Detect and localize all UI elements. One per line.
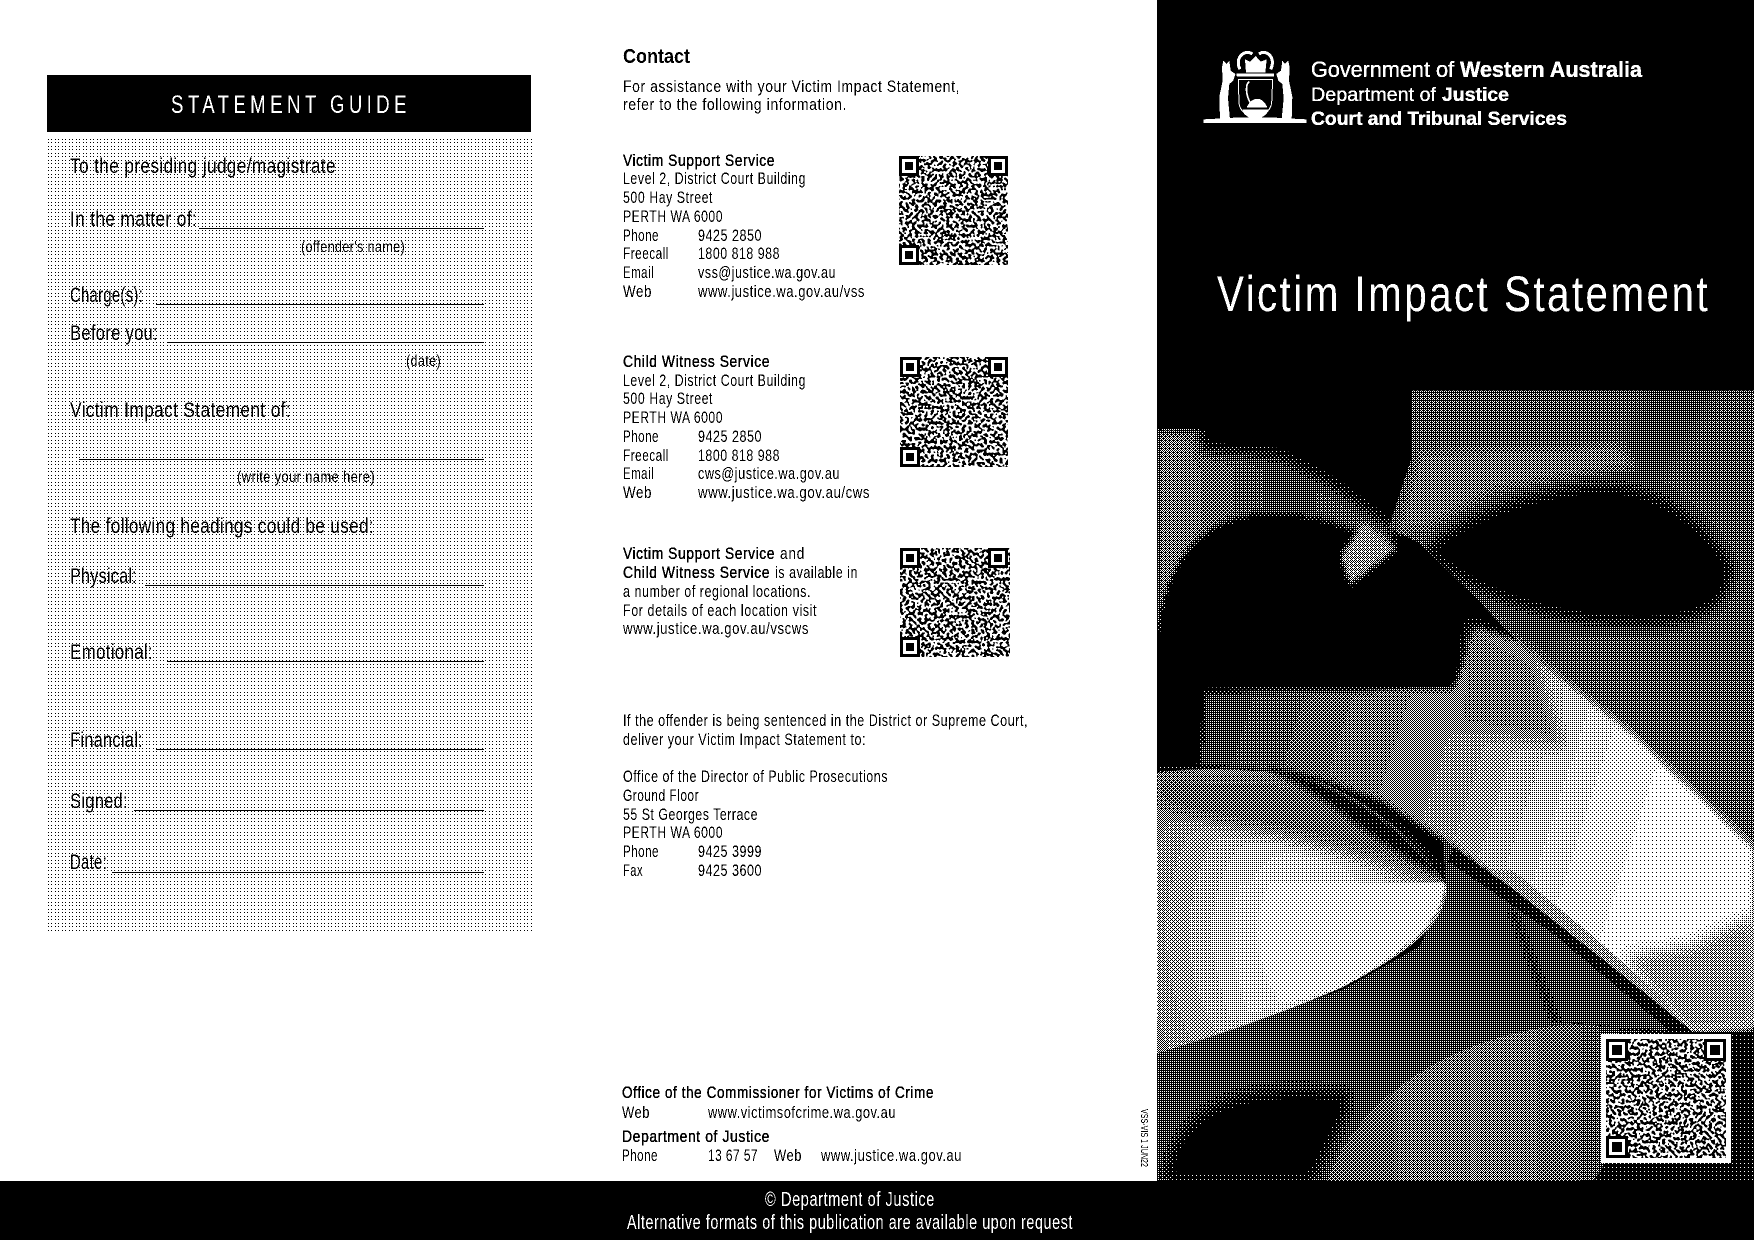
child witness service details: Web bbox=[623, 483, 652, 502]
form field: victim impact statement of: (write your name here) bbox=[237, 469, 375, 486]
regional locations note: and bbox=[780, 544, 805, 563]
child witness service details: PERTH WA 6000 bbox=[623, 408, 723, 427]
form field: presiding judge: To the presiding judge/magistrate bbox=[70, 155, 336, 178]
cover photograph: dithered abstract curves bbox=[1150, 380, 1754, 1181]
child witness service details: cws@justice.wa.gov.au bbox=[698, 464, 840, 483]
office of the director of public prosecutions address: 9425 3600 bbox=[698, 861, 762, 880]
victim support service details: vss@justice.wa.gov.au bbox=[698, 263, 836, 282]
regional locations note: Child Witness Service bbox=[623, 563, 770, 582]
department of justice contact: 13 67 57 bbox=[708, 1146, 758, 1165]
victim support service details bbox=[623, 151, 865, 301]
icon: Western Australia coat of arms bbox=[1203, 52, 1307, 123]
child witness service details: Phone bbox=[623, 427, 659, 446]
regional locations note: Victim Support Service bbox=[623, 544, 775, 563]
lens highlight bbox=[1157, 769, 1447, 1053]
form field: in the matter of: (offender's name) bbox=[301, 239, 405, 256]
cover black background bbox=[1157, 0, 1754, 1181]
office of the director of public prosecutions address: Ground Floor bbox=[623, 786, 699, 805]
bottom shapes bbox=[1165, 1091, 1350, 1181]
form field: charges: Charge(s): bbox=[70, 284, 143, 307]
delivery instructions: If the offender is being sentenced in the District or Supreme Court, bbox=[623, 711, 1028, 730]
victim support service details: PERTH WA 6000 bbox=[623, 207, 723, 226]
regional locations note: www.justice.wa.gov.au/vscws bbox=[622, 619, 809, 638]
victim support service details: 9425 2850 bbox=[698, 226, 762, 245]
form field: victim impact statement of: Victim Impact Statement of: bbox=[70, 399, 291, 422]
regional locations note: is available in bbox=[775, 563, 858, 582]
child witness service details: Freecall bbox=[623, 446, 669, 465]
department of justice contact: www.justice.wa.gov.au bbox=[820, 1146, 962, 1165]
child witness service details: 1800 818 988 bbox=[698, 446, 780, 465]
footer bar bbox=[0, 1181, 1754, 1240]
delivery instructions: deliver your Victim Impact Statement to: bbox=[623, 730, 866, 749]
victim support service details: Freecall bbox=[623, 244, 669, 263]
form field: physical: Physical: bbox=[70, 565, 137, 588]
form field: before you: (date) bbox=[406, 353, 441, 370]
QR code: victim support service bbox=[899, 156, 1008, 265]
regional locations note bbox=[622, 544, 858, 638]
suggested headings intro: The following headings could be used: bbox=[70, 515, 374, 538]
government department names: Western Australia bbox=[1460, 57, 1643, 82]
office of the director of public prosecutions address: PERTH WA 6000 bbox=[623, 823, 723, 842]
form field: in the matter of: In the matter of: bbox=[70, 208, 197, 231]
office of the director of public prosecutions address: Fax bbox=[623, 861, 643, 880]
child witness service details: Level 2, District Court Building bbox=[623, 371, 806, 390]
victim support service details: Level 2, District Court Building bbox=[623, 169, 806, 188]
footer alternative formats line: Alternative formats of this publication are available upon request bbox=[627, 1212, 1073, 1234]
QR code: regional locations bbox=[900, 548, 1010, 657]
government department names: Government of bbox=[1311, 57, 1455, 82]
victim support service details: Phone bbox=[623, 226, 659, 245]
panel: statement guide form bbox=[47, 75, 532, 933]
victim support service details: www.justice.wa.gov.au/vss bbox=[697, 282, 865, 301]
lower dark zone bbox=[1157, 839, 1689, 1181]
QR code: child witness service bbox=[900, 357, 1008, 467]
commissioner for victims of crime contact bbox=[622, 1083, 934, 1122]
contact intro: refer to the following information. bbox=[623, 95, 847, 114]
victim support service details: Victim Support Service bbox=[623, 151, 775, 170]
form field: before you: Before you: bbox=[70, 322, 158, 345]
diagonal bright band bbox=[1200, 630, 1754, 1033]
government department names bbox=[1311, 57, 1643, 130]
department of justice contact: Department of Justice bbox=[622, 1127, 770, 1146]
regional locations note: a number of regional locations. bbox=[623, 582, 811, 601]
office of the director of public prosecutions address: 55 St Georges Terrace bbox=[623, 805, 758, 824]
child witness service details: 500 Hay Street bbox=[623, 389, 713, 408]
statement guide heading bar bbox=[47, 75, 531, 132]
dotted form background bbox=[48, 139, 532, 933]
office of the director of public prosecutions address: Office of the Director of Public Prosecutions bbox=[623, 767, 888, 786]
dark edge strip and sliver bbox=[1450, 854, 1689, 1038]
statement guide heading bar: STATEMENT GUIDE bbox=[171, 91, 411, 119]
vertical publication code: VSS-VIS 1 JUN22 bbox=[1138, 1109, 1149, 1167]
office of the director of public prosecutions address bbox=[623, 767, 888, 880]
government department names: Court and Tribunal Services bbox=[1311, 108, 1567, 130]
QR code: cover bbox=[1601, 1034, 1731, 1163]
victim support service details: Web bbox=[623, 282, 652, 301]
child witness service details: Email bbox=[623, 464, 654, 483]
panel: cover bbox=[1150, 0, 1754, 1181]
commissioner for victims of crime contact: Web bbox=[622, 1103, 650, 1122]
form field: emotional: Emotional: bbox=[70, 641, 153, 664]
form field: date: Date: bbox=[70, 851, 107, 874]
contact intro bbox=[623, 77, 960, 114]
victim support service details: Email bbox=[623, 263, 654, 282]
form field: in the matter of bbox=[70, 208, 484, 256]
department of justice contact bbox=[622, 1127, 962, 1165]
department of justice contact: Phone bbox=[622, 1146, 658, 1165]
commissioner for victims of crime contact: Office of the Commissioner for Victims of Crime bbox=[622, 1083, 934, 1102]
contact intro: For assistance with your Victim Impact Statement, bbox=[623, 77, 960, 96]
department of justice contact: Web bbox=[774, 1146, 802, 1165]
child witness service details: 9425 2850 bbox=[698, 427, 762, 446]
victim support service details: 500 Hay Street bbox=[623, 188, 713, 207]
form field: victim impact statement of bbox=[70, 399, 484, 486]
victim support service details: 1800 818 988 bbox=[698, 244, 780, 263]
child witness service details bbox=[623, 352, 870, 502]
delivery instructions bbox=[623, 711, 1028, 749]
form field: signed: Signed: bbox=[70, 790, 128, 813]
footer copyright line: © Department of Justice bbox=[765, 1189, 935, 1211]
office of the director of public prosecutions address: Phone bbox=[623, 842, 659, 861]
dark shapes bbox=[1157, 513, 1464, 768]
government department names: Department of bbox=[1311, 84, 1437, 106]
form field: before you bbox=[70, 322, 484, 370]
regional locations note: For details of each location visit bbox=[623, 601, 817, 620]
panel: contact information bbox=[622, 46, 1149, 1167]
child witness service details: www.justice.wa.gov.au/cws bbox=[697, 483, 870, 502]
upper photo tones bbox=[1389, 390, 1754, 847]
contact heading: Contact bbox=[623, 46, 690, 68]
child witness service details: Child Witness Service bbox=[623, 352, 770, 371]
government department names: Justice bbox=[1442, 84, 1509, 106]
office of the director of public prosecutions address: 9425 3999 bbox=[698, 842, 762, 861]
commissioner for victims of crime contact: www.victimsofcrime.wa.gov.au bbox=[707, 1103, 896, 1122]
form field: financial: Financial: bbox=[70, 729, 143, 752]
